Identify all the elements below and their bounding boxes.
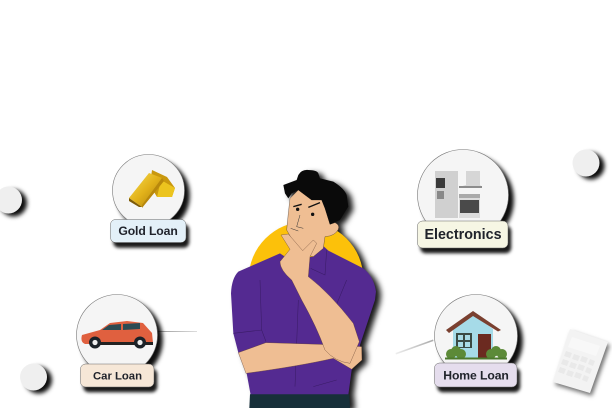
trousers — [249, 394, 350, 408]
eyes and brows — [291, 203, 320, 231]
thinking man illustration — [231, 170, 376, 408]
badge: car loan — [76, 294, 158, 387]
badge: electronics — [418, 150, 508, 248]
home loan label: Home Loan — [443, 368, 509, 382]
electronics label: Electronics — [424, 227, 502, 243]
icon: car — [81, 321, 153, 348]
coin: bottom left — [20, 364, 47, 390]
electronics circle — [418, 150, 508, 240]
home loan circle — [434, 294, 518, 378]
gold loan label: Gold Loan — [118, 224, 178, 238]
raised arm and hand — [280, 234, 359, 363]
hair — [283, 170, 348, 224]
yellow circle behind man — [249, 222, 363, 336]
badge: gold loan — [110, 154, 186, 242]
connector line: car loan — [157, 331, 197, 332]
gold loan circle — [112, 154, 184, 226]
lower forearm — [238, 343, 362, 373]
shirt fold lines — [233, 250, 347, 387]
badge: home loan — [434, 294, 518, 387]
icon: appliances — [435, 171, 482, 218]
icon: house — [445, 311, 507, 360]
coin: top right — [572, 150, 600, 176]
face, neck and ear — [287, 190, 339, 257]
car loan circle — [76, 294, 158, 376]
coin: left — [0, 186, 22, 214]
icon: gold bars — [129, 170, 175, 208]
calculator — [553, 329, 608, 393]
car loan label: Car Loan — [93, 370, 142, 382]
connector line: home loan — [396, 340, 434, 354]
shirt — [231, 246, 376, 395]
